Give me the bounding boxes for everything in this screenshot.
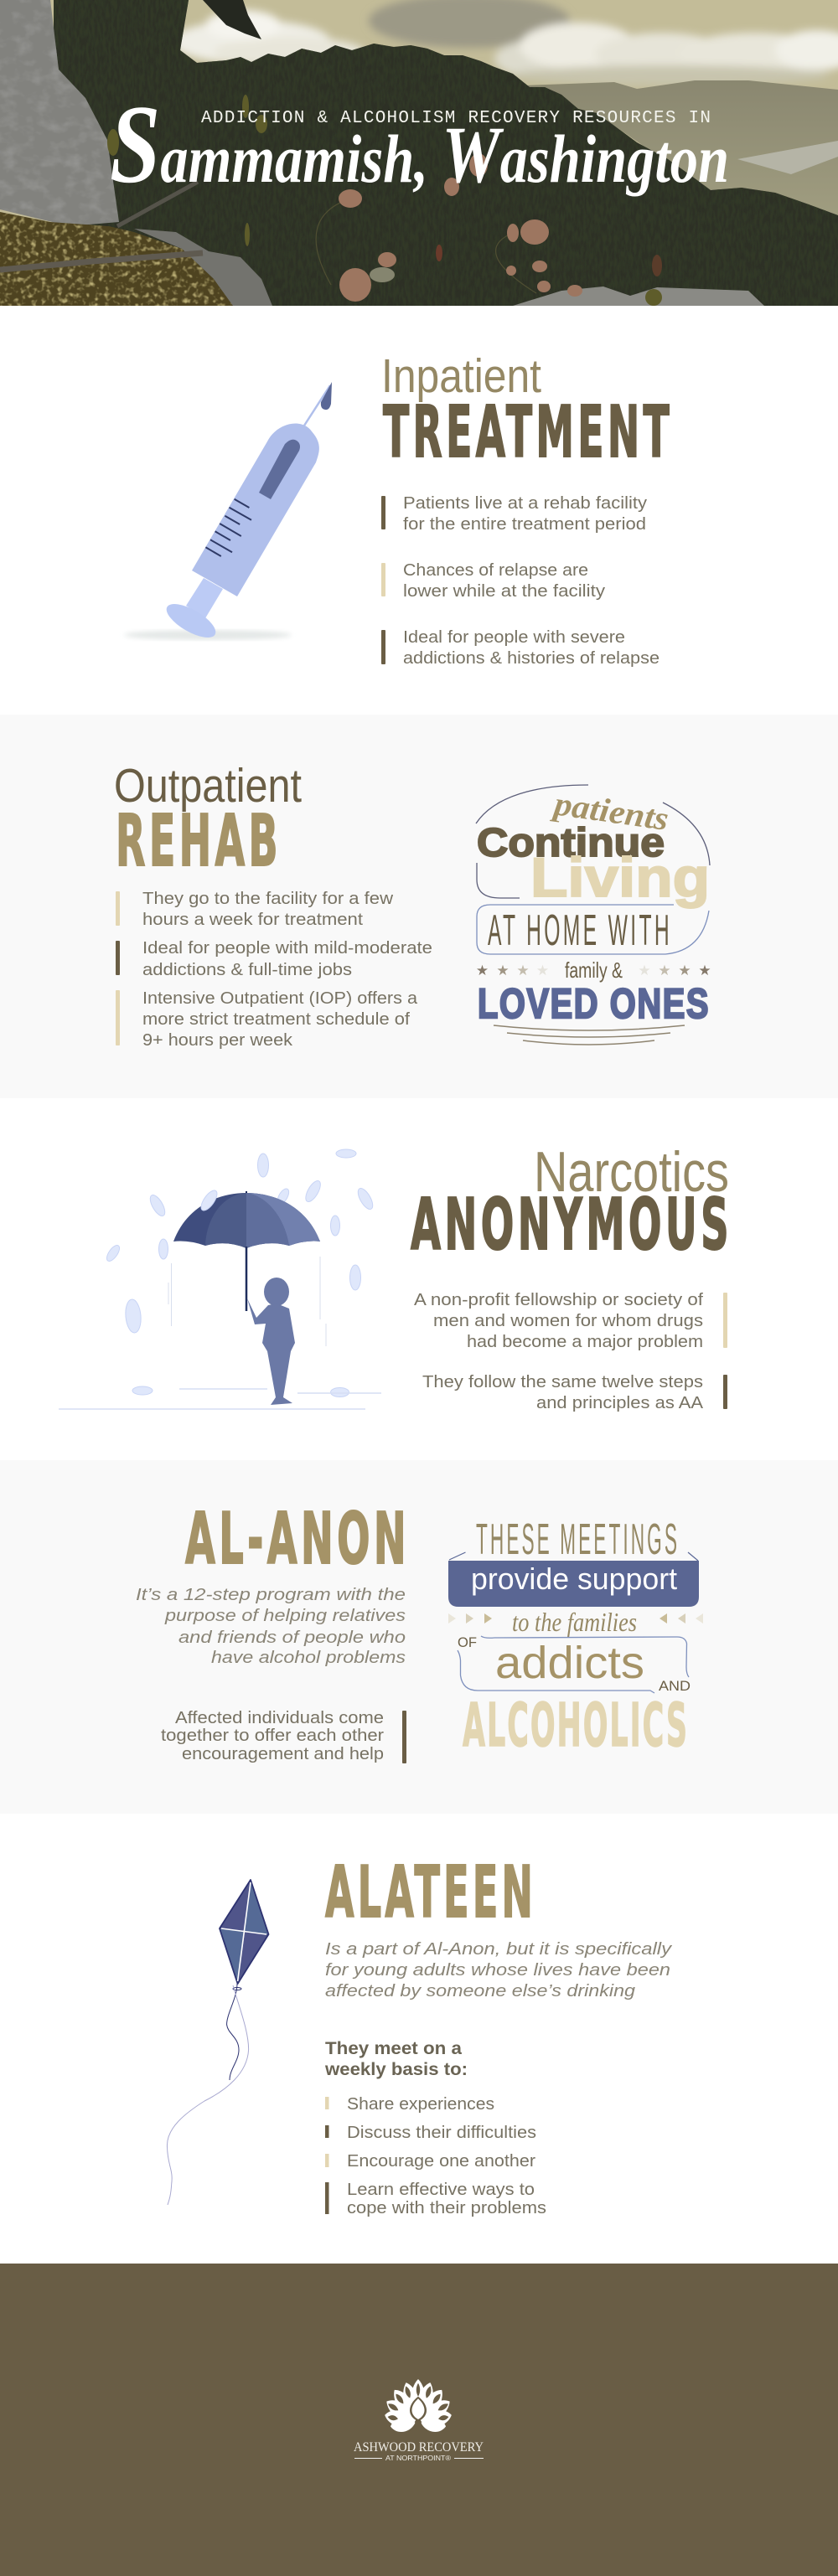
logo: ashwood recovery lotus <box>383 2379 453 2434</box>
typographic badge: patients continue living: ★ <box>516 963 530 978</box>
typographic badge: patients continue living: ★ <box>476 963 489 978</box>
bullet: intensive outpatient <box>116 989 418 1050</box>
bullet: twelve steps: and principles as AA <box>536 1393 703 1412</box>
panel: alateen <box>167 1851 673 2217</box>
typographic badge: patients continue living: patients <box>550 784 671 838</box>
bullet: twelve steps <box>422 1372 727 1412</box>
illustration: umbrella and pills <box>59 1149 381 1409</box>
bullet: patients live: for the entire treatment period <box>403 514 646 534</box>
subheading: weekly basis: They meet on a <box>325 2039 462 2058</box>
bullet: twelve steps: They follow the same twelve steps <box>422 1372 703 1391</box>
typographic badge: patients continue living: Continue <box>477 821 665 865</box>
footer <box>0 2264 838 2576</box>
bullet: affected individuals: encouragement and help <box>182 1744 384 1763</box>
typographic badge: these meetings: provide support <box>471 1562 677 1596</box>
panel: outpatient rehab <box>0 715 838 1098</box>
icon: kite <box>167 1880 268 2205</box>
icon: syringe <box>124 382 332 644</box>
typographic badge: patients continue living: ★ <box>496 963 510 978</box>
bullet: affected individuals: together to offer each other <box>161 1726 384 1745</box>
typographic badge: patients continue living: family & <box>565 958 623 983</box>
bullet: non-profit fellowship: A non-profit fellowship or society of <box>414 1290 703 1309</box>
list: weekly activities: cope with their problems <box>347 2198 546 2217</box>
hero title: Sammamish, Washington <box>110 82 729 206</box>
heading: al-anon: AL-ANON <box>185 1498 410 1581</box>
bullet: patients live <box>381 493 648 534</box>
typographic badge: these meetings: OF <box>458 1634 477 1650</box>
bullet: mild-moderate: Ideal for people with mild-moderate <box>142 938 432 958</box>
typographic badge: these meetings: addicts <box>495 1638 644 1688</box>
typographic badge: patients continue living: ★ <box>698 963 711 978</box>
bullet: intensive outpatient: more strict treatment schedule of <box>142 1009 410 1029</box>
description: 12-step program: It’s a 12-step program with the <box>136 1585 406 1604</box>
typographic badge: these meetings: AND <box>659 1678 691 1694</box>
hero subtitle: ADDICTION & ALCOHOLISM RECOVERY RESOURCES IN <box>201 109 711 128</box>
bullet: ideal for severe: addictions & histories of relapse <box>403 648 660 668</box>
heading: inpatient: Inpatient <box>381 349 541 403</box>
list: weekly activities: Discuss their difficulties <box>347 2123 536 2142</box>
bullet: affected individuals: Affected individuals come <box>175 1708 384 1727</box>
panel: narcotics anonymous <box>59 1140 732 1412</box>
bullet: ideal for severe <box>381 627 660 668</box>
bullet: patients live: Patients live at a rehab facility <box>403 493 648 513</box>
description: 12-step program: have alcohol problems <box>211 1648 406 1667</box>
description: part of al-anon: affected by someone else’s drinking <box>325 1981 636 2000</box>
panel: inpatient treatment <box>124 349 673 668</box>
bullet: few hours a week: They go to the facility for a few <box>142 889 393 908</box>
typographic badge: patients continue living: Living <box>530 846 710 908</box>
heading: alateen: ALATEEN <box>325 1851 536 1934</box>
list: weekly activities: Share experiences <box>347 2094 494 2114</box>
subheading: weekly basis <box>324 2039 468 2079</box>
typographic badge: these meetings: to the families <box>512 1607 637 1637</box>
list: weekly activities <box>325 2094 546 2217</box>
bullet: ideal for severe: Ideal for people with severe <box>403 627 625 647</box>
bullet: affected individuals <box>161 1708 406 1763</box>
panel: al-anon <box>0 1460 838 1814</box>
bullet: chances of relapse <box>381 560 606 601</box>
logo text: at northpoint: AT NORTHPOINT® <box>385 2455 451 2462</box>
typographic badge: patients continue living: ★ <box>536 963 549 978</box>
description: part of al-anon: Is a part of Al-Anon, but it is specifically <box>325 1939 673 1959</box>
bullet: few hours a week: hours a week for treatment <box>142 910 363 929</box>
subheading: weekly basis: weekly basis to: <box>324 2060 468 2079</box>
typographic badge: patients continue living: ★ <box>678 963 691 978</box>
description: part of al-anon <box>325 1939 673 2000</box>
list: weekly activities: Learn effective ways to <box>347 2180 535 2199</box>
typographic badge: patients continue living: LOVED ONES <box>478 980 710 1027</box>
description: part of al-anon: for young adults whose lives have been <box>325 1960 670 1980</box>
heading: rehab: REHAB <box>116 800 282 883</box>
bullet: chances of relapse: lower while at the facility <box>403 581 606 601</box>
bullet: few hours a week <box>116 889 393 929</box>
description: 12-step program <box>136 1585 406 1667</box>
typographic badge: these meetings <box>448 1515 703 1760</box>
logo text: ashwood recovery: ASHWOOD RECOVERY <box>354 2440 484 2455</box>
description: 12-step program: and friends of people who <box>178 1628 406 1647</box>
bullet: intensive outpatient: 9+ hours per week <box>142 1030 293 1050</box>
bullet: mild-moderate: addictions & full-time jobs <box>142 960 352 979</box>
bullet: chances of relapse: Chances of relapse are <box>403 560 588 580</box>
list: weekly activities: Encourage one another <box>347 2151 535 2171</box>
bullet: mild-moderate <box>116 938 432 979</box>
bullet: intensive outpatient: Intensive Outpatient (IOP) offers a <box>142 989 418 1008</box>
typographic badge: patients continue living: ★ <box>638 963 651 978</box>
bullet: non-profit fellowship: had become a major problem <box>467 1332 703 1351</box>
typographic badge: patients continue living: ★ <box>658 963 671 978</box>
typographic badge: patients continue living <box>476 784 711 1045</box>
bullet: non-profit fellowship <box>414 1290 727 1351</box>
heading: outpatient: Outpatient <box>114 759 302 813</box>
hero photo: mountain forest banner <box>0 0 838 306</box>
description: 12-step program: purpose of helping relatives <box>164 1606 406 1625</box>
bullet: non-profit fellowship: men and women for whom drugs <box>433 1311 703 1330</box>
heading: narcotics: Narcotics <box>534 1140 729 1204</box>
